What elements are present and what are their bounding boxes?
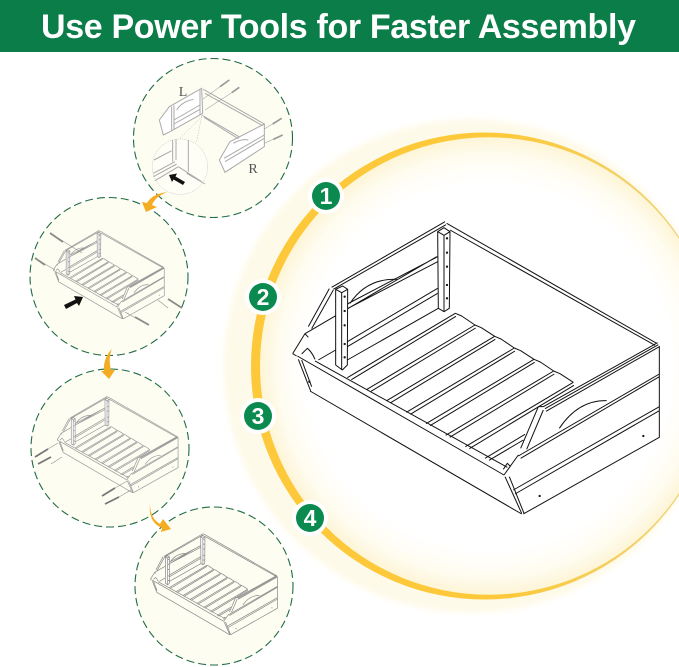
arrow: step 1 to 2 — [142, 192, 167, 212]
step badge 1: 1 — [320, 183, 333, 209]
title: Use Power Tools for Faster Assembly — [41, 8, 636, 46]
screws — [35, 233, 168, 325]
header banner — [0, 0, 679, 52]
connecting rails — [202, 89, 264, 139]
step badge 4: 4 — [304, 505, 317, 531]
step circle 3: screws at front — [31, 369, 189, 527]
step badge 1 — [308, 178, 344, 214]
screws — [48, 443, 131, 497]
step badge 2: 2 — [257, 284, 269, 310]
right panel R — [219, 124, 264, 172]
black arrow — [64, 296, 83, 309]
label R: R — [248, 162, 258, 177]
step badge 3 — [240, 398, 276, 434]
step circle 2: slats — [30, 198, 188, 356]
detail inset — [152, 139, 208, 194]
arrow: step 3 to 4 — [150, 504, 171, 532]
step circle 1: side panels — [134, 58, 292, 218]
label L: L — [179, 85, 187, 100]
step badge 3: 3 — [252, 403, 264, 429]
step badge 4 — [292, 500, 328, 536]
step circle 4: assembled bed — [135, 507, 293, 665]
screws — [203, 80, 283, 143]
guide lines — [177, 117, 202, 142]
arrow: step 2 to 3 — [101, 349, 115, 379]
main bed illustration — [293, 222, 659, 514]
step badge 2 — [245, 279, 281, 315]
inset arrow — [169, 174, 185, 185]
progress ring — [224, 119, 679, 613]
left panel L — [159, 88, 203, 135]
